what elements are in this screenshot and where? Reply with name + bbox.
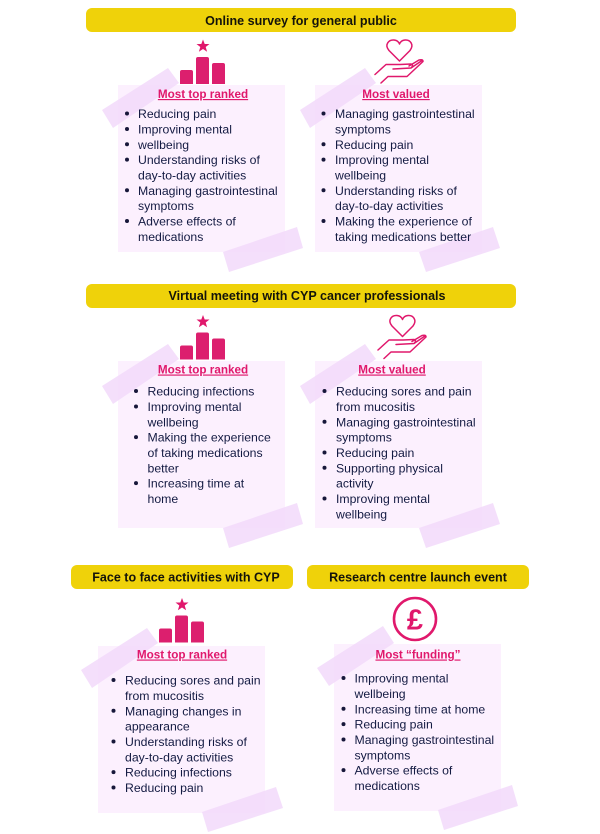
list: most top ranked: Improving mental bbox=[148, 400, 241, 414]
list: most valued: Making the experience of bbox=[335, 214, 472, 228]
list: most valued: symptoms bbox=[336, 431, 392, 445]
list: most top ranked: Understanding risks of bbox=[125, 735, 247, 749]
header: face to face activities bbox=[71, 565, 293, 589]
list: most top ranked: Reducing infections bbox=[148, 384, 254, 398]
list: most valued bbox=[322, 107, 475, 244]
panel: most top ranked, online survey bbox=[102, 68, 303, 272]
icon: hand holding heart bbox=[375, 40, 423, 83]
list: most valued: Managing gastrointestinal bbox=[336, 415, 476, 429]
list: most top ranked bbox=[112, 674, 261, 795]
icon: pound coin bbox=[394, 598, 436, 640]
list: most valued: day-to-day activities bbox=[335, 199, 443, 213]
icon: hand holding heart bbox=[378, 315, 426, 358]
list: most valued: wellbeing bbox=[335, 507, 387, 521]
header: virtual meeting bbox=[86, 284, 516, 308]
panel: most valued, online survey bbox=[300, 68, 500, 272]
list: most valued: from mucositis bbox=[336, 400, 415, 414]
heading: most funding: Most “funding” bbox=[375, 648, 461, 662]
list: most top ranked: home bbox=[148, 492, 178, 506]
list: most top ranked: Increasing time at bbox=[148, 477, 245, 491]
list: most top ranked: Reducing pain bbox=[125, 781, 204, 795]
list: most funding: Increasing time at home bbox=[354, 702, 485, 716]
panel: most top ranked, face to face bbox=[81, 628, 283, 832]
header: online survey: Online survey for general public bbox=[205, 14, 397, 28]
list: most top ranked: wellbeing bbox=[146, 415, 199, 429]
panel: most funding, launch event bbox=[317, 626, 518, 830]
list: most valued: Reducing sores and pain bbox=[336, 384, 472, 398]
list: most top ranked: Managing gastrointestinal bbox=[138, 184, 278, 198]
list: most top ranked: Managing changes in bbox=[125, 704, 242, 718]
list: most valued: Managing gastrointestinal bbox=[335, 107, 475, 121]
list: most funding: medications bbox=[354, 779, 420, 793]
list: most valued: taking medications better bbox=[335, 230, 471, 244]
list: most valued: wellbeing bbox=[334, 168, 386, 182]
heading: most valued: Most valued bbox=[358, 364, 426, 376]
list: most top ranked bbox=[125, 107, 278, 244]
list: most top ranked: appearance bbox=[125, 720, 190, 734]
list: most valued: Reducing pain bbox=[336, 446, 415, 460]
header: research centre launch: Research centre launch event bbox=[329, 570, 508, 584]
list: most top ranked: of taking medications bbox=[148, 446, 263, 460]
list: most funding: Improving mental bbox=[354, 672, 448, 686]
icon: pound coin: £ bbox=[407, 604, 423, 636]
list: most valued: Understanding risks of bbox=[335, 184, 457, 198]
heading: most top ranked: Most top ranked bbox=[158, 88, 248, 101]
list: most top ranked: wellbeing bbox=[137, 138, 189, 152]
list: most top ranked: symptoms bbox=[138, 199, 194, 213]
heading: most top ranked: Most top ranked bbox=[158, 364, 248, 376]
heading: most top ranked: Most top ranked bbox=[137, 648, 227, 662]
icon: ranked bars with star bbox=[159, 598, 204, 642]
list: most top ranked: Reducing infections bbox=[125, 766, 232, 780]
header: online survey bbox=[86, 8, 516, 32]
list: most top ranked: Understanding risks of bbox=[138, 153, 260, 167]
icon: ranked bars with star bbox=[180, 315, 225, 360]
list: most funding: Reducing pain bbox=[354, 718, 433, 732]
list: most valued: Supporting physical bbox=[336, 461, 443, 475]
list: most funding: symptoms bbox=[354, 748, 410, 762]
header: virtual meeting: Virtual meeting with CYP cancer professionals bbox=[168, 289, 446, 303]
heading: most valued: Most valued bbox=[362, 88, 430, 101]
panel: most top ranked, virtual meeting bbox=[102, 344, 303, 548]
list: most valued: Improving mental bbox=[336, 492, 430, 506]
header: face to face activities: Face to face activities with CYP bbox=[92, 570, 280, 584]
list: most valued: activity bbox=[336, 477, 374, 491]
panel: most valued, virtual meeting bbox=[300, 344, 500, 548]
list: most funding: Adverse effects of bbox=[354, 764, 453, 778]
list: most top ranked: day-to-day activities bbox=[138, 168, 246, 182]
list: most funding bbox=[342, 672, 494, 793]
list: most valued: symptoms bbox=[335, 122, 391, 136]
list: most top ranked: Reducing pain bbox=[138, 107, 217, 121]
list: most top ranked: Reducing sores and pain bbox=[125, 674, 261, 688]
list: most top ranked: better bbox=[148, 461, 179, 475]
list: most valued: Reducing pain bbox=[335, 138, 414, 152]
list: most top ranked: day-to-day activities bbox=[125, 750, 233, 764]
list: most valued bbox=[322, 384, 476, 521]
icon: ranked bars with star bbox=[180, 40, 225, 84]
list: most valued: Improving mental bbox=[335, 153, 429, 167]
list: most funding: Managing gastrointestinal bbox=[354, 733, 494, 747]
list: most top ranked: from mucositis bbox=[125, 689, 204, 703]
list: most top ranked: Improving mental bbox=[138, 122, 232, 136]
list: most top ranked: Making the experience bbox=[148, 431, 271, 445]
list: most funding: wellbeing bbox=[354, 687, 406, 701]
header: research centre launch bbox=[307, 565, 529, 589]
list: most top ranked: Adverse effects of bbox=[138, 214, 236, 228]
list: most top ranked bbox=[134, 384, 271, 506]
list: most top ranked: medications bbox=[138, 230, 203, 244]
